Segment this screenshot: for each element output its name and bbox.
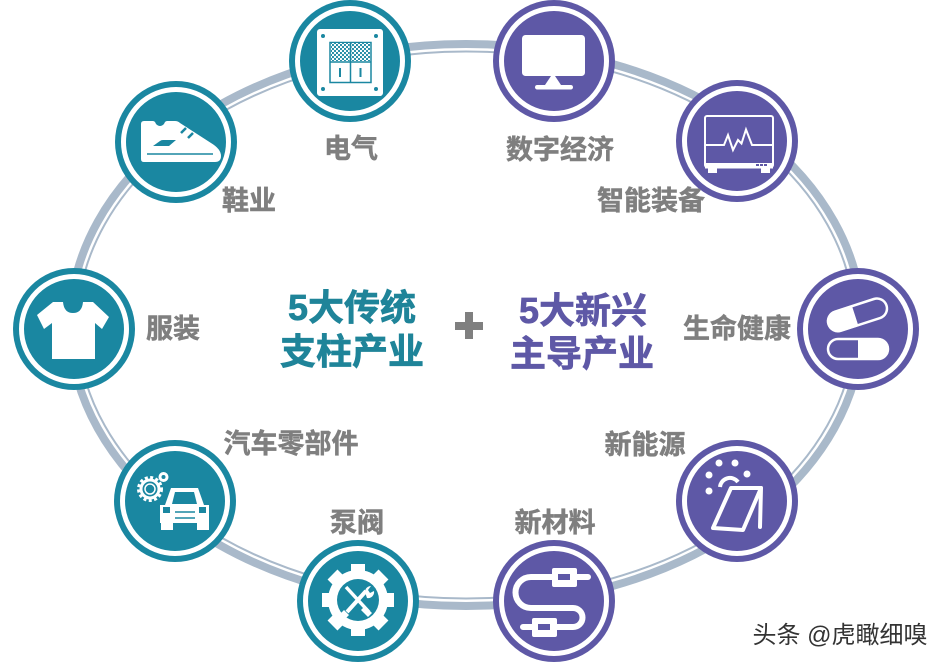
label: 汽车零部件: 汽车零部件 bbox=[224, 429, 358, 459]
label: 鞋业: 鞋业 bbox=[222, 186, 276, 216]
icon: S-shaped cable bbox=[516, 568, 588, 637]
icon: t-shirt bbox=[37, 302, 109, 359]
icon: shoe bbox=[141, 121, 221, 162]
node: 泵阀 bbox=[297, 508, 419, 662]
heading: 5大传统支柱产业 bbox=[280, 287, 424, 372]
node: 电气 bbox=[289, 0, 411, 164]
label: 数字经济: 数字经济 bbox=[506, 135, 614, 165]
heading: 5大传统支柱产业: 支柱产业 bbox=[280, 331, 424, 372]
label: 生命健康: 生命健康 bbox=[683, 313, 791, 344]
node: 数字经济 bbox=[493, 0, 615, 165]
node: 新能源 bbox=[604, 430, 798, 562]
icon: solar panel and sun bbox=[706, 460, 761, 530]
label: 电气: 电气 bbox=[324, 134, 378, 164]
watermark: 头条 @虎瞰细嗅 bbox=[752, 622, 928, 649]
node: 鞋业 bbox=[115, 81, 276, 216]
label: 新能源: 新能源 bbox=[604, 430, 686, 460]
heading: 5大新兴主导产业 bbox=[510, 290, 654, 374]
ring connecting the industry icons bbox=[70, 44, 862, 606]
icon: electrical switch panel bbox=[317, 29, 383, 96]
icon: capsules bbox=[824, 295, 890, 360]
node: 服装 bbox=[13, 268, 200, 390]
label: 智能装备: 智能装备 bbox=[597, 186, 705, 216]
icon: monitor bbox=[522, 35, 585, 90]
label: 服装: 服装 bbox=[146, 314, 200, 344]
heading: 5大新兴主导产业: 主导产业 bbox=[510, 333, 654, 374]
icon: device with waveform bbox=[705, 116, 773, 173]
icon: gear with wrench and screwdriver bbox=[322, 564, 394, 636]
icon: plus sign bbox=[455, 312, 483, 339]
node: 汽车零部件 bbox=[114, 429, 358, 562]
node: 生命健康 bbox=[683, 268, 919, 390]
label: 新材料: 新材料 bbox=[514, 508, 596, 538]
icon: car with gears bbox=[138, 474, 209, 530]
node: 智能装备 bbox=[597, 80, 798, 216]
heading: 5大传统支柱产业: 5大传统 bbox=[288, 287, 416, 328]
heading: 5大新兴主导产业: 5大新兴 bbox=[519, 290, 647, 331]
label: 泵阀: 泵阀 bbox=[330, 508, 384, 538]
node: 新材料 bbox=[493, 508, 615, 662]
